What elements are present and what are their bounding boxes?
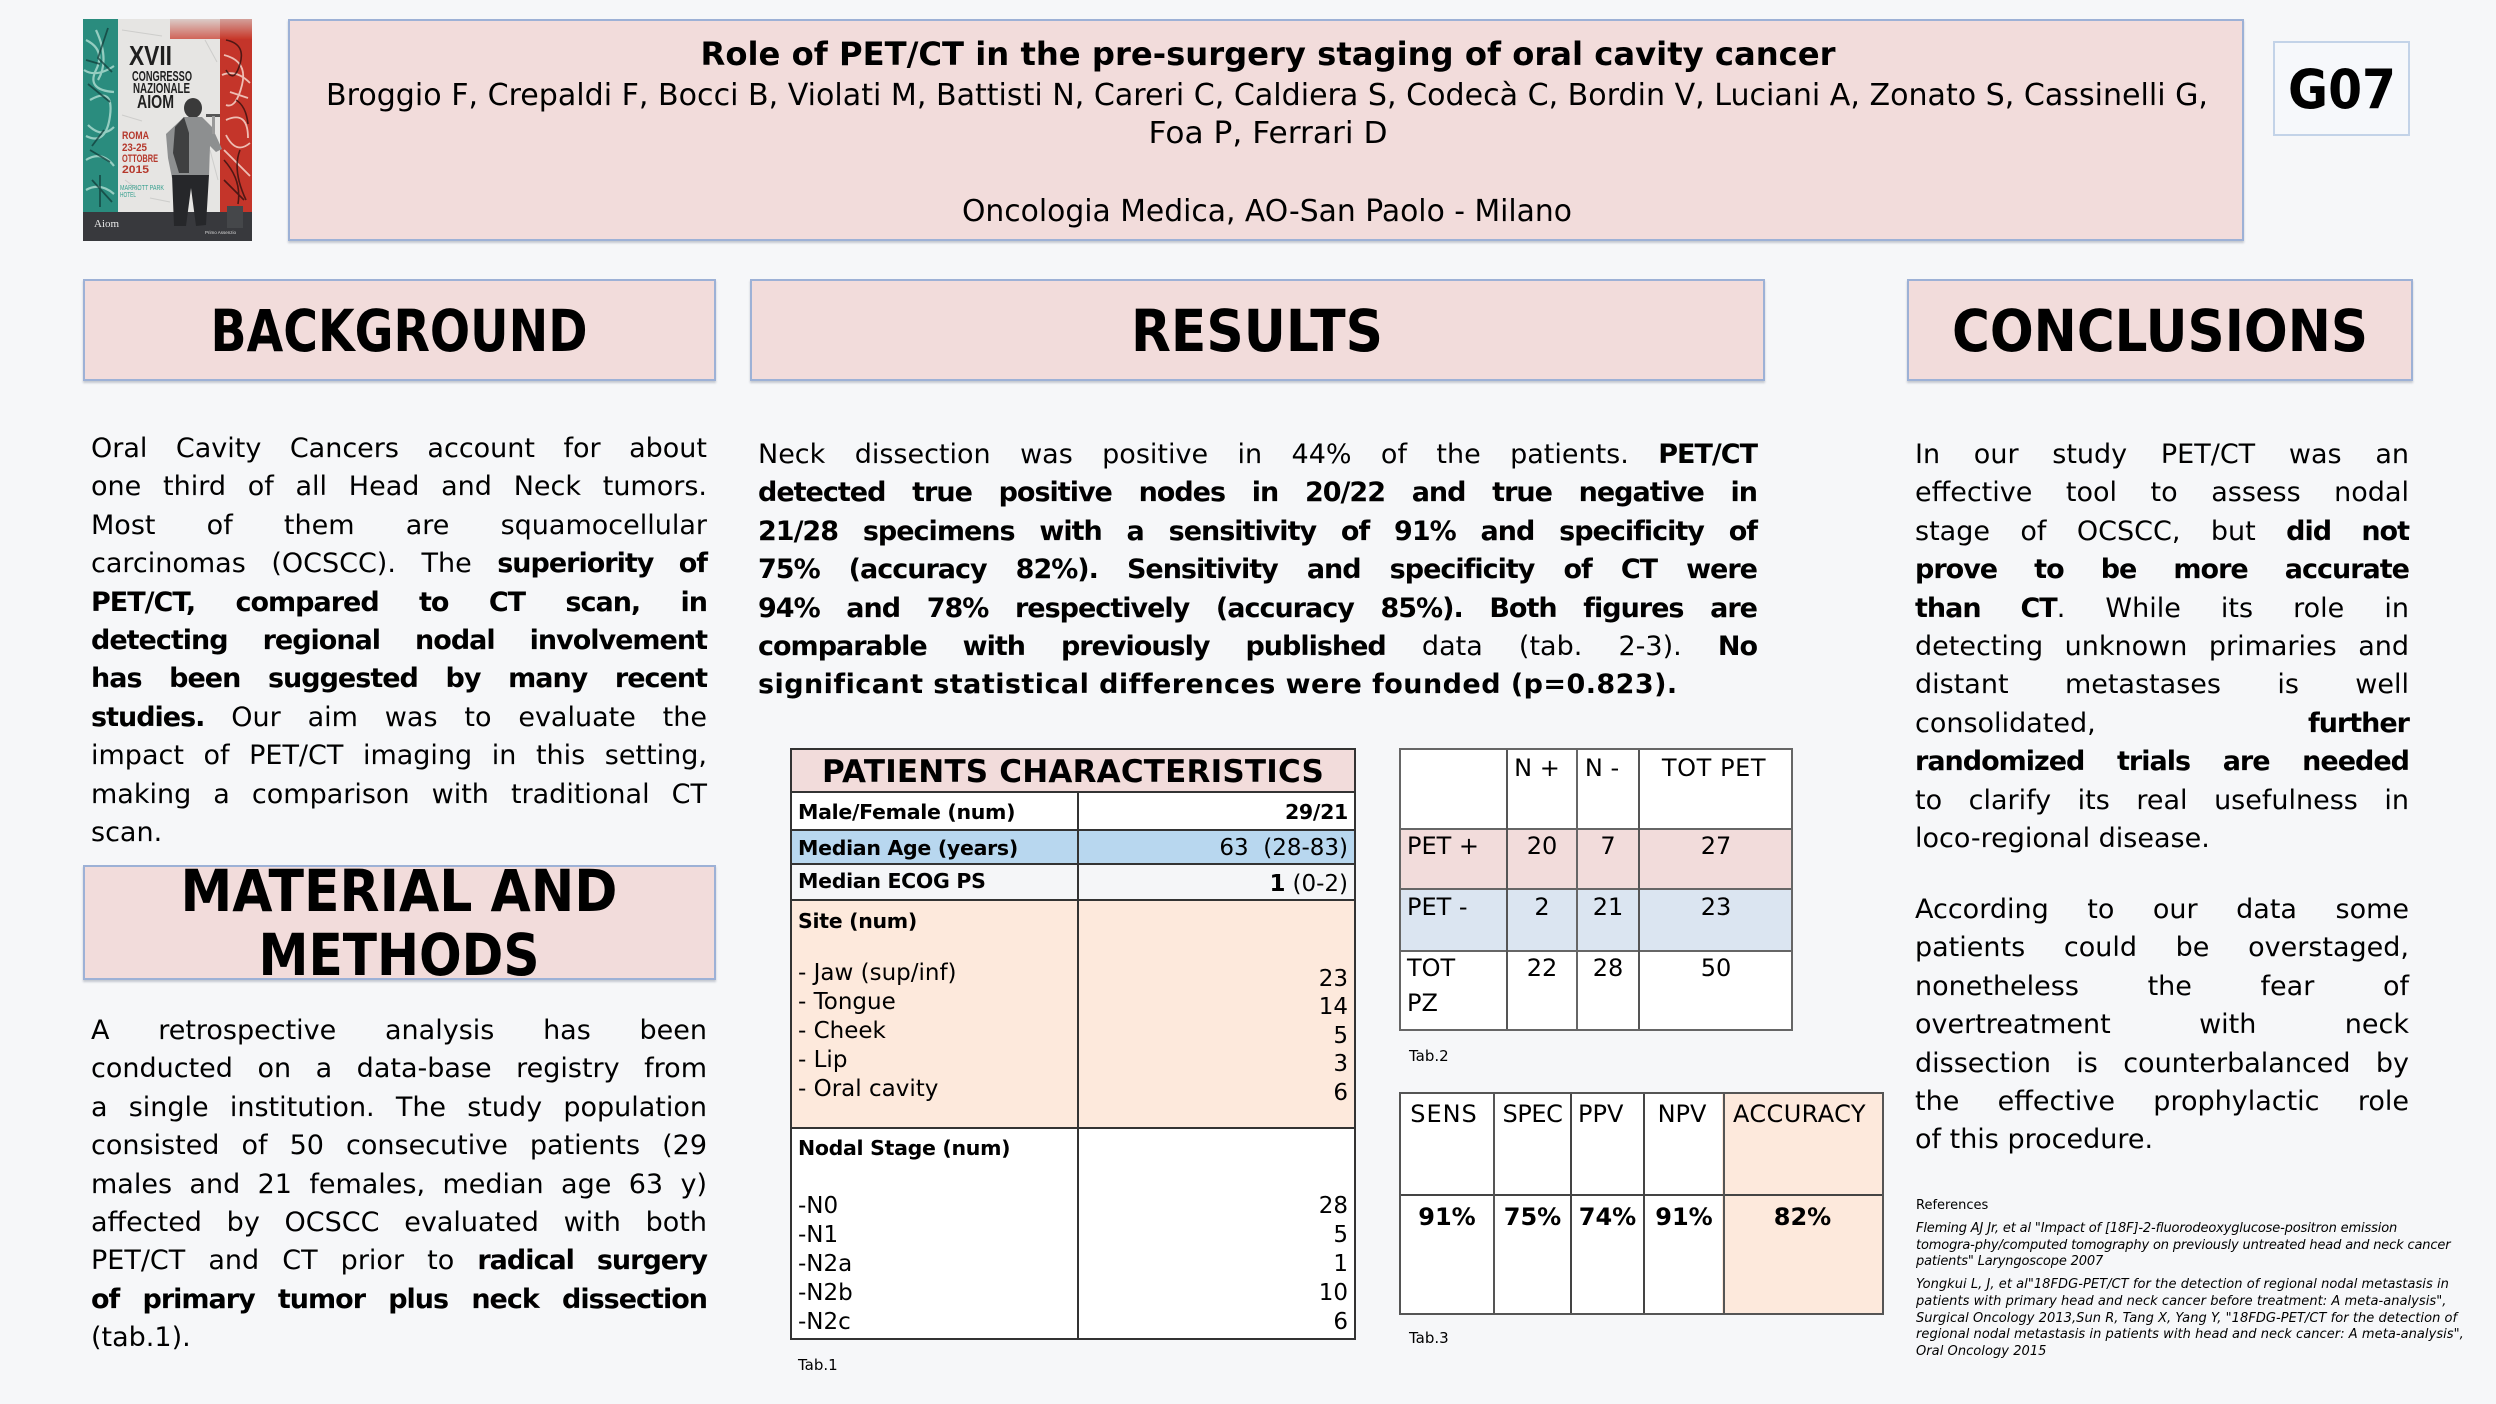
table 1: patients characteristics <box>790 748 1356 1340</box>
congress poster image: OTTOBRE <box>122 153 158 165</box>
background text: scan. <box>91 817 162 848</box>
results text: 94% and 78% respectively (accuracy 85%). Both figures are <box>758 593 1757 624</box>
congress poster image: 2015 <box>122 164 149 176</box>
heading: conclusions: CONCLUSIONS <box>1952 297 2368 365</box>
table 1: patients characteristics: 63 (28-83) <box>1219 835 1348 861</box>
table 1: patients characteristics: -N2c <box>798 1309 851 1335</box>
methods text: a single institution. The study population <box>91 1092 707 1123</box>
table 3: diagnostic accuracy: 82% <box>1774 1203 1831 1231</box>
congress poster image: Aiom <box>94 218 120 230</box>
table 2: PET vs nodal status: TOT PET <box>1662 754 1766 782</box>
heading: results: RESULTS <box>1131 297 1383 365</box>
methods text: PET/CT and CT prior to radical surgery <box>91 1245 707 1276</box>
table 1: patients characteristics: 6 <box>1333 1309 1348 1335</box>
conclusions text: than CT. While its role in <box>1915 593 2409 624</box>
table 1: patients characteristics: 10 <box>1319 1280 1348 1306</box>
poster title text: CONGRESSO <box>132 68 192 85</box>
methods text <box>91 1015 708 1353</box>
table 1: patients characteristics: 6 <box>1333 1080 1348 1106</box>
poster title text: NAZIONALE <box>133 80 190 97</box>
results text <box>758 439 1758 700</box>
table 2: PET vs nodal status: 28 <box>1593 954 1623 982</box>
conclusions text: detecting unknown primaries and <box>1915 631 2409 662</box>
conclusions text: loco-regional disease. <box>1915 823 2210 854</box>
table 1: patients characteristics: Median Age (years) <box>798 836 1018 860</box>
table 1: patients characteristics: - Cheek <box>798 1018 886 1044</box>
references: Oral Oncology 2015 <box>1916 1344 2046 1359</box>
table 1: patients characteristics: - Tongue <box>798 989 896 1015</box>
table 1: patients characteristics: Nodal Stage (num) <box>798 1136 1010 1160</box>
heading: material and methods <box>83 865 716 980</box>
table 2: PET vs nodal status: TOT <box>1407 954 1455 982</box>
table 2: PET vs nodal status: PET - <box>1407 893 1468 921</box>
conclusions text: distant metastases is well <box>1915 669 2409 700</box>
background text: one third of all Head and Neck tumors. <box>91 471 707 502</box>
table 1: patients characteristics: 1 <box>1333 1251 1348 1277</box>
conclusions text: second paragraph <box>1915 894 2410 1155</box>
poster title text: XVII <box>129 40 172 71</box>
table 3: diagnostic accuracy: NPV <box>1658 1100 1706 1128</box>
table 1: patients characteristics: -N1 <box>798 1222 838 1248</box>
poster title text <box>129 40 192 112</box>
table 1: patients characteristics: 3 <box>1333 1051 1348 1077</box>
poster code box <box>2273 41 2410 136</box>
table 3: diagnostic accuracy: 91% <box>1655 1203 1713 1231</box>
conclusions text: In our study PET/CT was an <box>1915 439 2409 470</box>
table 2: PET vs nodal status: 22 <box>1527 954 1557 982</box>
background text: studies. Our aim was to evaluate the <box>91 702 707 733</box>
conclusions text: second paragraph: the effective prophylactic role <box>1915 1086 2409 1117</box>
conclusions text: to clarify its real usefulness in <box>1915 785 2409 816</box>
table 1: patients characteristics: - Lip <box>798 1047 847 1073</box>
heading: conclusions <box>1907 279 2413 381</box>
background text: PET/CT, compared to CT scan, in <box>91 587 707 618</box>
congress poster image <box>83 19 252 241</box>
congress poster image: MARRIOTT PARK <box>120 185 164 192</box>
results text: detected true positive nodes in 20/22 and true negative in <box>758 477 1757 508</box>
poster code box: G07 <box>2288 58 2396 121</box>
methods text: males and 21 females, median age 63 y) <box>91 1169 707 1200</box>
table 2: PET vs nodal status: 27 <box>1701 832 1731 860</box>
results text: significant statistical differences were founded (p=0.823). <box>758 669 1678 700</box>
table 3: diagnostic accuracy: 91% <box>1418 1203 1476 1231</box>
background text: carcinomas (OCSCC). The superiority of <box>91 548 707 579</box>
table 3: diagnostic accuracy: SENS <box>1410 1100 1478 1128</box>
table 3: diagnostic accuracy: SPEC <box>1502 1100 1563 1128</box>
background text <box>91 433 708 848</box>
methods text: conducted on a data-base registry from <box>91 1053 707 1084</box>
table 1: patients characteristics: 5 <box>1333 1222 1348 1248</box>
table 2: PET vs nodal status: PZ <box>1407 989 1438 1017</box>
references <box>1916 1198 2464 1359</box>
table 1: patients characteristics: 28 <box>1319 1193 1348 1219</box>
conclusions text: randomized trials are needed <box>1915 746 2409 777</box>
results text: Neck dissection was positive in 44% of the patients. PET/CT <box>758 439 1757 470</box>
table 1: patients characteristics: -N0 <box>798 1193 838 1219</box>
table 2: PET vs nodal status: 23 <box>1701 893 1731 921</box>
table 2: PET vs nodal status: 7 <box>1600 832 1616 860</box>
table 1: patients characteristics: 5 <box>1333 1023 1348 1049</box>
painter figure <box>166 98 243 228</box>
caption: tab 2: Tab.2 <box>1409 1047 1449 1065</box>
results text: 75% (accuracy 82%). Sensitivity and specificity of CT were <box>758 554 1757 585</box>
references: Yongkui L, J, et al"18FDG-PET/CT for the detection of regional nodal metastasis in <box>1916 1277 2449 1292</box>
congress poster image: Primo Assenzio <box>205 230 237 235</box>
table 1: patients characteristics: PATIENTS CHARACTERISTICS <box>822 754 1324 790</box>
table 1: patients characteristics: -N2b <box>798 1280 853 1306</box>
conclusions text: effective tool to assess nodal <box>1915 477 2409 508</box>
conclusions text: second paragraph: nonetheless the fear of <box>1915 971 2409 1002</box>
heading: background <box>83 279 716 381</box>
conclusions text: prove to be more accurate <box>1915 554 2409 585</box>
table 3: diagnostic accuracy: 75% <box>1504 1203 1561 1231</box>
table 1: patients characteristics: - Jaw (sup/inf) <box>798 960 957 986</box>
references: Surgical Oncology 2013,Sun R, Tang X, Yang Y, "18FDG-PET/CT for the detection of <box>1916 1311 2457 1326</box>
heading: results <box>750 279 1765 381</box>
heading: material and methods: METHODS <box>258 921 540 989</box>
table 1: patients characteristics: -N2a <box>798 1251 852 1277</box>
methods text: affected by OCSCC evaluated with both <box>91 1207 707 1238</box>
table 1: patients characteristics: Site (num) <box>798 909 917 933</box>
authors: Broggio F, Crepaldi F, Bocci B, Violati M, Battisti N, Careri C, Caldiera S, Codecà C, Bordin V, Luciani A, Zonato S, Cassinelli G, <box>326 78 2208 113</box>
poster title text: AIOM <box>137 92 174 112</box>
background text: Oral Cavity Cancers account for about <box>91 433 707 464</box>
table 3: diagnostic accuracy <box>1399 1092 1884 1315</box>
congress poster image: HOTEL <box>120 192 136 199</box>
table 1: patients characteristics: Median ECOG PS <box>798 869 986 893</box>
conclusions text: second paragraph: overtreatment with neck <box>1915 1009 2409 1040</box>
methods text: (tab.1). <box>91 1322 191 1353</box>
methods text: A retrospective analysis has been <box>91 1015 707 1046</box>
table 1: patients characteristics: Male/Female (num) <box>798 800 1015 824</box>
table 2: PET vs nodal status: 2 <box>1534 893 1550 921</box>
conclusions text: second paragraph: patients could be overstaged, <box>1915 932 2409 963</box>
table 2: PET vs nodal status: N + <box>1514 754 1560 782</box>
conclusions text: consolidated, further <box>1915 708 2409 739</box>
table 3: diagnostic accuracy: 74% <box>1579 1203 1636 1231</box>
table 2: PET vs nodal status: 21 <box>1593 893 1623 921</box>
table 1: patients characteristics: - Oral cavity <box>798 1076 938 1102</box>
table 2: PET vs nodal status <box>1399 748 1793 1031</box>
heading: material and methods: MATERIAL AND <box>180 857 618 925</box>
authors <box>326 78 2208 229</box>
references: patients with primary head and neck cancer before treatment: A meta-analysis", <box>1916 1294 2446 1309</box>
congress poster image: ROMA <box>122 130 149 142</box>
table 1: patients characteristics: 29/21 <box>1285 800 1348 824</box>
background text: has been suggested by many recent <box>91 663 707 694</box>
table 3: diagnostic accuracy: ACCURACY <box>1733 1100 1866 1128</box>
results text: 21/28 specimens with a sensitivity of 91% and specificity of <box>758 516 1757 547</box>
background text: making a comparison with traditional CT <box>91 779 707 810</box>
background text: Most of them are squamocellular <box>91 510 707 541</box>
title: Role of PET/CT in the pre-surgery staging of oral cavity cancer <box>700 35 1836 73</box>
references: regional nodal metastasis in patients with head and neck cancer: A meta-analysis", <box>1916 1327 2464 1342</box>
table 1: patients characteristics: 1 (0-2) <box>1269 871 1348 897</box>
conclusions text: second paragraph: According to our data some <box>1915 894 2409 925</box>
panel: title block <box>288 19 2244 241</box>
table 1: patients characteristics: 23 <box>1319 966 1348 992</box>
results text: comparable with previously published data (tab. 2-3). No <box>758 631 1757 662</box>
conclusions text: stage of OCSCC, but did not <box>1915 516 2409 547</box>
table 2: PET vs nodal status: 50 <box>1701 954 1731 982</box>
heading: background: BACKGROUND <box>210 297 588 365</box>
methods text: of primary tumor plus neck dissection <box>91 1284 707 1315</box>
affiliation: Oncologia Medica, AO-San Paolo - Milano <box>962 194 1572 229</box>
table 3: diagnostic accuracy: PPV <box>1578 1100 1623 1128</box>
congress poster image: 23-25 <box>122 142 147 154</box>
references: patients" Laryngoscope 2007 <box>1916 1254 2103 1269</box>
conclusions text <box>1915 439 2410 854</box>
references: References <box>1916 1198 1988 1213</box>
caption: tab 1: Tab.1 <box>798 1356 838 1374</box>
conclusions text: second paragraph: dissection is counterbalanced by <box>1915 1048 2409 1079</box>
caption: tab 3: Tab.3 <box>1409 1329 1449 1347</box>
table 2: PET vs nodal status: 20 <box>1527 832 1557 860</box>
references: tomogra-phy/computed tomography on previously untreated head and neck cancer <box>1916 1238 2450 1253</box>
table 1: patients characteristics: 14 <box>1319 994 1348 1020</box>
authors: Foa P, Ferrari D <box>1148 116 1388 151</box>
table 2: PET vs nodal status: N - <box>1585 754 1619 782</box>
background text: impact of PET/CT imaging in this setting, <box>91 740 707 771</box>
background text: detecting regional nodal involvement <box>91 625 707 656</box>
table 2: PET vs nodal status: PET + <box>1407 832 1479 860</box>
conclusions text: second paragraph: of this procedure. <box>1915 1124 2153 1155</box>
methods text: consisted of 50 consecutive patients (29 <box>91 1130 707 1161</box>
references: Fleming AJ Jr, et al "Impact of [18F]-2-fluorodeoxyglucose-positron emission <box>1916 1221 2397 1236</box>
